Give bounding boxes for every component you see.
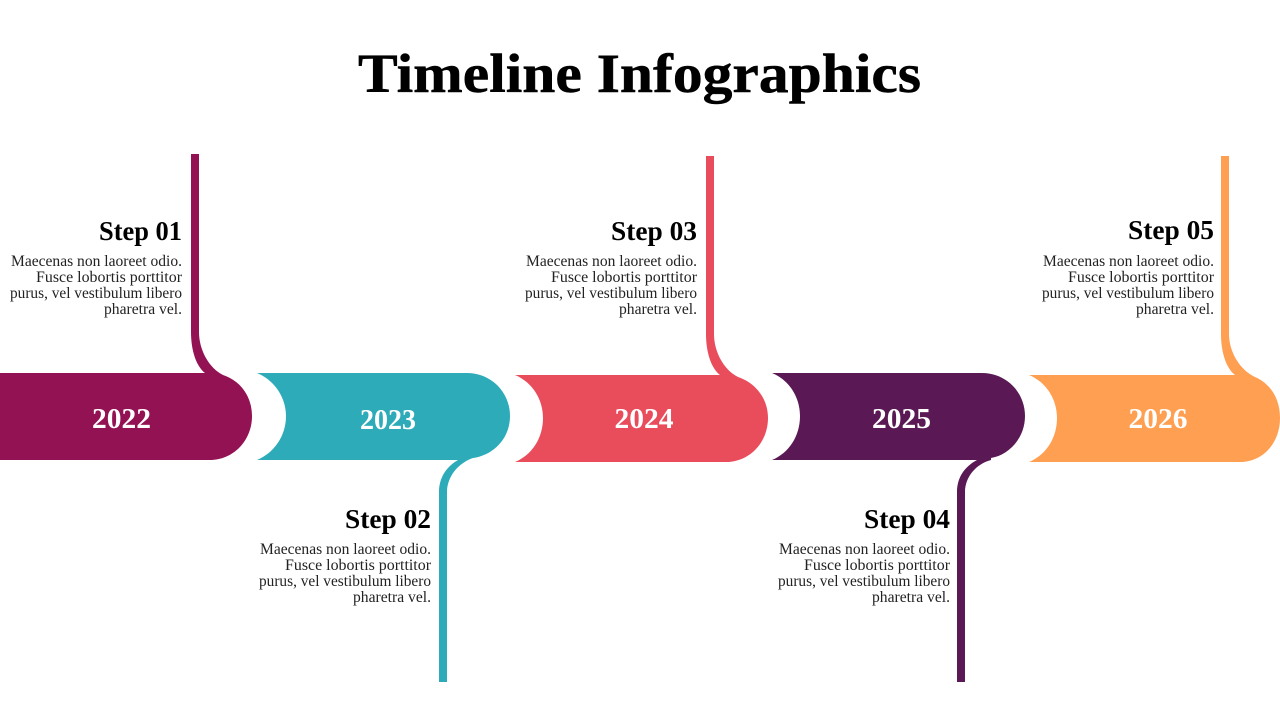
text block: step 05 — [1042, 253, 1215, 318]
heading: step 02: Step 02 — [345, 504, 431, 534]
heading: step 04: Step 04 — [864, 504, 950, 534]
text block: step 01: Fusce lobortis porttitor — [36, 269, 183, 286]
year: 2023: 2023 — [360, 404, 416, 436]
heading: step 03: Step 03 — [611, 216, 697, 246]
text block: step 05: Fusce lobortis porttitor — [1068, 269, 1215, 286]
text block: step 01: Maecenas non laoreet odio. — [11, 253, 182, 270]
panel: step 02 — [257, 373, 510, 682]
text block: step 02: pharetra vel. — [353, 589, 431, 606]
bar and connector: 2024 — [515, 156, 768, 462]
text block: step 02: Fusce lobortis porttitor — [285, 557, 432, 574]
year: 2026: 2026 — [1128, 403, 1188, 435]
year: 2024: 2024 — [614, 403, 674, 435]
year: 2022: 2022 — [92, 403, 151, 435]
text block: step 04: purus, vel vestibulum libero — [778, 573, 950, 590]
text block: step 02: purus, vel vestibulum libero — [259, 573, 431, 590]
year: 2025: 2025 — [872, 403, 931, 435]
bar and connector: 2023 — [257, 373, 510, 682]
panel: step 05 — [1029, 156, 1280, 462]
text block: step 01: pharetra vel. — [104, 301, 182, 318]
text block: step 03: Maecenas non laoreet odio. — [526, 253, 697, 270]
text block: step 05: purus, vel vestibulum libero — [1042, 285, 1214, 302]
panel: step 03 — [515, 156, 768, 462]
text block: step 05: Maecenas non laoreet odio. — [1043, 253, 1214, 270]
text block: step 02: Maecenas non laoreet odio. — [260, 541, 431, 558]
bar and connector: 2022 — [0, 154, 252, 460]
text block: step 02 — [259, 541, 432, 606]
panel: step 04 — [772, 373, 1025, 682]
text block: step 01: purus, vel vestibulum libero — [10, 285, 182, 302]
bar and connector: 2025 — [772, 373, 1025, 682]
bar and connector: 2026 — [1029, 156, 1280, 462]
text block: step 03: pharetra vel. — [619, 301, 697, 318]
heading: step 05: Step 05 — [1128, 215, 1214, 245]
text block: step 04: Maecenas non laoreet odio. — [779, 541, 950, 558]
text block: step 03: Fusce lobortis porttitor — [551, 269, 698, 286]
panel: step 01 — [0, 154, 252, 460]
heading: step 01: Step 01 — [99, 216, 182, 246]
text block: step 04 — [778, 541, 951, 606]
text block: step 01 — [10, 253, 183, 318]
text block: step 04: pharetra vel. — [872, 589, 950, 606]
text block: step 03 — [525, 253, 698, 318]
text block: step 05: pharetra vel. — [1136, 301, 1214, 318]
title: Timeline Infographics — [358, 43, 921, 104]
text block: step 04: Fusce lobortis porttitor — [804, 557, 951, 574]
text block: step 03: purus, vel vestibulum libero — [525, 285, 697, 302]
